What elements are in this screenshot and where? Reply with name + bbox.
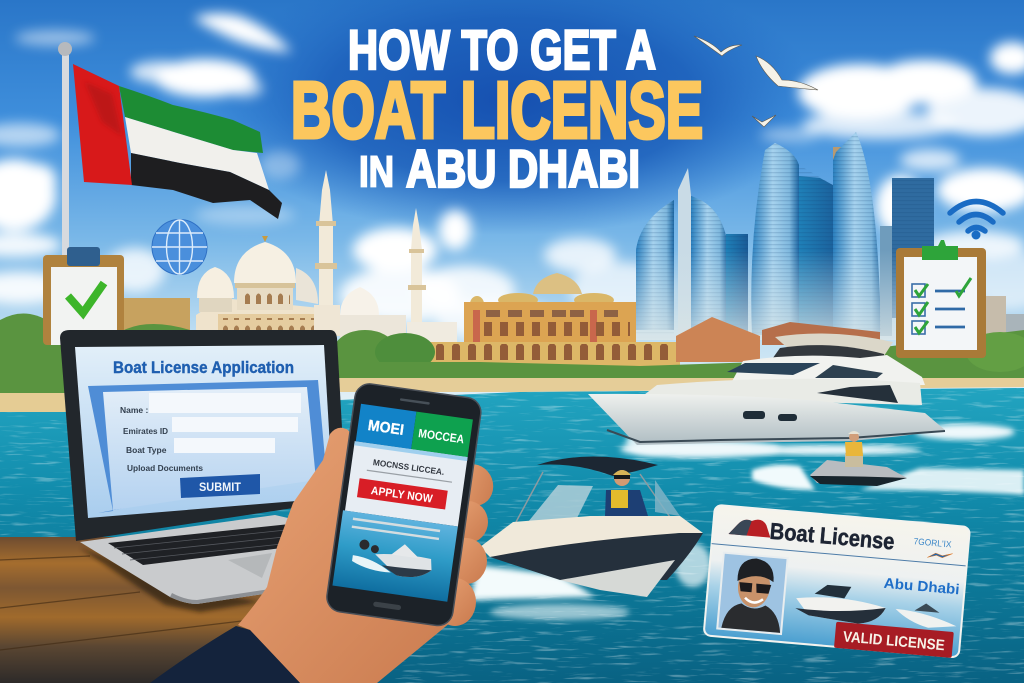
yacht hull	[588, 394, 945, 445]
title	[291, 18, 703, 199]
title line 1: HOW TO GET A	[348, 18, 656, 81]
seagulls	[694, 36, 818, 127]
screen heading: Boat License Application	[113, 359, 294, 377]
form labels and fields: Boat Type	[126, 445, 167, 455]
lower halls	[196, 298, 340, 336]
card mark	[912, 536, 954, 560]
clipboard: checklist	[896, 240, 986, 358]
title glow	[200, 0, 820, 235]
laptop screen	[75, 345, 333, 518]
sky background	[0, 0, 1024, 400]
flag	[58, 42, 282, 255]
hand	[150, 428, 499, 683]
red stripe	[73, 64, 132, 185]
form labels and fields	[120, 393, 301, 473]
app photo	[332, 510, 458, 602]
jet ski	[752, 431, 1024, 495]
white stripe	[125, 117, 269, 190]
window bands	[636, 132, 934, 335]
title line 2: BOAT LICENSE	[291, 66, 703, 154]
yacht hardtop	[775, 333, 893, 356]
moccea panel: MOCCEA	[418, 426, 465, 446]
speedboat deck	[480, 516, 703, 557]
card logo	[729, 517, 772, 538]
form labels and fields: Emirates ID	[123, 426, 168, 436]
laptop shadow	[80, 548, 260, 612]
laptop lid	[60, 330, 346, 541]
table planks	[0, 556, 250, 650]
apply button: APPLY NOW	[370, 485, 433, 506]
card location: Abu Dhabi	[883, 576, 960, 598]
speedboat wake	[470, 543, 711, 620]
license card	[704, 505, 970, 659]
flag pole	[58, 42, 72, 255]
moei panel: MOEI	[367, 417, 405, 439]
skyline towers	[636, 132, 1024, 340]
submit button	[180, 474, 260, 498]
sea ripples	[0, 388, 1024, 683]
laptop	[60, 330, 346, 612]
jet ski wake	[752, 465, 1024, 495]
small dome	[340, 287, 379, 315]
main dome	[234, 242, 296, 283]
apply button	[357, 478, 448, 510]
mosque	[196, 170, 457, 344]
speedboat lower hull	[560, 560, 675, 597]
laptop base	[80, 515, 340, 604]
card heading: Boat License	[769, 518, 896, 554]
jet ski body	[810, 460, 907, 485]
side domes	[197, 267, 234, 298]
form labels and fields: Upload Documents	[127, 463, 203, 473]
valid license badge	[834, 622, 954, 658]
title: ABU DHABI	[406, 140, 640, 199]
form backdrop	[88, 380, 326, 513]
driver	[605, 470, 648, 516]
form labels and fields: Name :	[120, 405, 149, 415]
clipboard: check	[43, 247, 124, 345]
rider	[845, 431, 863, 467]
icon: globe	[152, 220, 207, 274]
green stripe	[119, 86, 263, 153]
windshield	[528, 485, 593, 522]
title line 3: IN	[359, 148, 394, 196]
fingers	[434, 459, 499, 626]
valid license badge: VALID LICENSE	[842, 628, 945, 654]
sea	[0, 388, 1024, 683]
checklist rows	[912, 284, 925, 334]
speedboat	[470, 456, 711, 620]
speedboat dark hull	[490, 533, 703, 580]
black stripe	[131, 153, 282, 219]
card boat large	[794, 582, 887, 626]
bimini top	[537, 456, 658, 476]
main deck	[640, 379, 922, 405]
palace	[425, 273, 880, 367]
large minaret	[314, 170, 340, 335]
yacht wake	[620, 424, 1015, 458]
card boat small	[894, 601, 958, 630]
yacht	[588, 333, 1015, 458]
wooden table	[0, 537, 300, 683]
tower base haze	[636, 250, 936, 340]
small minaret	[407, 208, 457, 344]
icon: wifi	[950, 202, 1003, 240]
card mark: 7GORL'IX	[913, 536, 952, 549]
app body	[345, 441, 468, 526]
shoreline trees and beach	[0, 313, 1024, 413]
moei panel	[356, 404, 416, 449]
phone	[325, 382, 483, 627]
sleeve	[150, 626, 300, 683]
upper deck	[730, 355, 925, 385]
card photo	[716, 552, 789, 635]
moccea panel	[411, 412, 473, 457]
left gold building	[124, 298, 190, 332]
palm and thumb	[238, 428, 470, 683]
app line text: MOCNSS LICCEA.	[372, 457, 445, 477]
clouds	[0, 13, 1024, 340]
speaker and home bar	[400, 398, 430, 405]
submit button: SUBMIT	[199, 480, 242, 494]
